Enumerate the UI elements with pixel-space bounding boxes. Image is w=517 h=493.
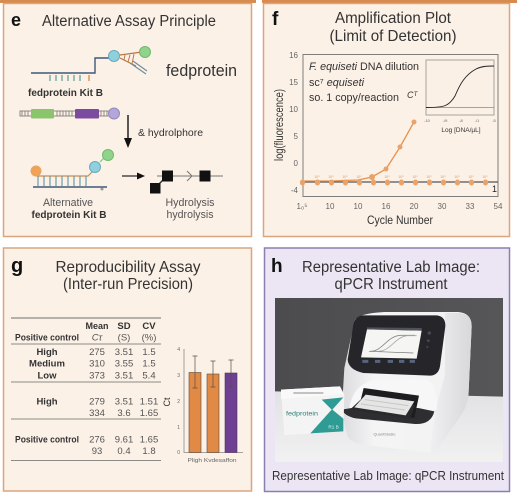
table: precision: 1.51 [140,396,158,408]
inset chart [407,60,497,134]
x axis labels: 10 [326,202,335,211]
y axis labels: -4 [291,186,299,195]
x axis labels: 20 [410,202,419,211]
bar chart: Ct: 2 [177,399,180,405]
point labels [314,175,488,179]
table: precision: (S) [118,332,130,344]
bar: medium [207,374,219,452]
table: precision: 3.51 [115,370,133,382]
legend text: sc⁷ equiseti [309,77,365,89]
x axis labels: 30 [438,202,447,211]
inset chart: -/1 [475,118,480,123]
reagent box [281,386,344,435]
inset chart: -8 [459,118,464,123]
bar chart: Ct: 3 [177,373,180,379]
x axis title: Cycle Number [367,213,433,227]
point labels: 10⁵ [440,175,446,179]
inset chart: Log [DNA/µL] [441,127,481,134]
label: alternative fedprotein kit B [32,197,106,221]
panel: amplification plot [264,4,510,236]
table: precision: 5.4 [142,370,156,382]
y axis title: log(fluorescence) [274,89,286,161]
legend text [309,61,419,104]
table: precision: 279 [89,396,105,408]
heading: reproducibility assay: (Inter-run Precision) [63,276,193,293]
point labels: 10⁵ [328,175,334,179]
label: fedprotein: fedprotein [166,62,237,80]
table: precision: 373 [89,370,105,382]
label: alternative fedprotein kit B: fedprotein Kit B [32,210,106,221]
x axis labels: 54 [494,202,503,211]
legend text: so. 1 copy/reaction [309,92,399,104]
x axis labels: 16 [382,202,391,211]
bar: high [189,372,201,452]
diagram: alternative probe [30,150,114,190]
y axis labels: 15 [289,78,299,87]
reagent box: R1 B [328,425,339,430]
touchscreen bezel [348,315,445,376]
bar chart: Ct [162,347,243,464]
table: precision [11,318,161,460]
panel: representative lab image [264,248,510,492]
bar chart: Ct: Pligh Kvdesaffon [188,458,236,464]
bar chart: Ct: 1 [177,425,180,431]
bar chart: Ct: 4 [177,347,180,353]
panel letter e: e [11,10,21,30]
table: precision: 3.55 [115,358,133,370]
point labels: 10⁵ [454,175,460,179]
label: fedprotein Kit B: fedprotein Kit B [28,88,103,99]
diagram: kit B probe [31,46,150,81]
table: precision: 3.51 [115,347,133,358]
reagent box: fedprotein [286,410,319,417]
label: hydrolysis: Hydrolysis [166,197,215,209]
point labels: 10⁵ [356,175,362,179]
table: precision: CV [142,321,156,332]
heading: amplification plot [330,10,456,45]
table: precision: 334 [89,408,105,419]
control icons [426,331,431,348]
heading: reproducibility assay [56,259,200,293]
point labels: 10⁵ [398,175,404,179]
table: precision: 0.4 [117,446,131,457]
table: precision: 3.6 [117,408,131,419]
point labels: 10⁵ [342,175,348,179]
table: precision: Positive control [15,434,79,446]
table: precision: 3.51 [115,396,133,408]
bar: low [225,373,237,452]
inset chart: -10 [424,118,431,123]
table: precision: 1.65 [140,408,158,419]
table: precision: High [36,396,58,408]
y axis labels: 0 [294,159,299,168]
photo: qPCR instrument [275,298,503,462]
table: precision: Positive control [15,332,79,344]
instrument body [342,312,472,452]
y axis labels: 10 [289,105,299,114]
point labels: 10⁵ [412,175,418,179]
table: precision: 93 [92,446,102,457]
drawer opening [358,388,419,418]
inset chart: -5 [492,118,497,123]
inset chart: -/9 [443,118,448,123]
table: precision: Cτ [92,332,104,344]
arrow: right [122,172,145,180]
legend text: F. equiseti DNA dilution [309,61,419,73]
table: precision: Medium [29,358,65,370]
table: precision: 310 [89,358,105,370]
table: precision: 1.5 [142,358,156,370]
x axis labels: 33 [466,202,475,211]
plate tray [350,398,415,419]
panel letter h: h [271,256,283,277]
diagram: double-stranded construct [20,108,120,119]
y axis labels: 16 [289,51,299,60]
panel letter g: g [11,255,23,277]
table: precision: 1.5 [142,347,156,358]
amplification curve [303,122,414,181]
label: hydrolysis [166,197,215,221]
heading: amplification plot: Amplification Plot [335,10,452,27]
x axis labels: 1₀⁵ [296,202,308,211]
table: precision: Low [38,370,57,382]
y axis labels [289,51,299,195]
table: precision: SD [117,321,131,332]
caption: Representative Lab Image: qPCR Instrument [272,469,504,483]
label: hydrolysis: hydrolysis [166,209,214,221]
heading: representative lab image: Representative Lab Image: [302,259,480,276]
heading: representative lab image: qPCR Instrument [334,276,448,293]
label: alternative fedprotein kit B: Alternative [43,197,93,209]
point labels: 10⁵ [384,175,390,179]
point labels: 10⁵ [468,175,474,179]
bar chart: Ct: Ct [162,397,172,406]
table: precision: 275 [89,347,105,358]
x axis labels [296,202,503,211]
point labels: 10⁵ [314,175,320,179]
panel letter f: f [272,9,279,30]
line chart: amplification: 1 [492,184,497,194]
y axis labels: 5 [294,132,299,141]
table: precision: (%) [142,332,156,344]
heading: reproducibility assay: Reproducibility Assay [56,259,200,276]
heading: amplification plot: (Limit of Detection) [330,28,456,45]
point labels: 10⁵ [426,175,432,179]
diagram: hydrolysis products [150,170,223,194]
error bars [192,356,234,388]
bar chart: Ct: 0 [177,450,180,456]
table: precision: Mean [86,321,109,332]
touchscreen [361,327,422,361]
arrow: down [124,115,132,148]
inset chart: Cᵀ [407,90,418,100]
point labels: 10⁵ [482,175,488,179]
panel: alternative assay principle [4,4,252,236]
line chart: amplification [274,51,503,227]
dark apron [342,406,434,424]
x axis labels: 10 [354,202,363,211]
table: precision: 9.61 [115,434,133,446]
table: precision: 1.8 [142,446,156,457]
table: precision: High [36,347,58,358]
brand mark: QuantStudio [373,431,396,436]
table: precision: 276 [89,434,105,446]
heading: alternative assay principle: Alternative Assay Principle [42,13,216,30]
panel: reproducibility assay [4,248,252,491]
label: hydrophore: & hydrolphore [138,127,203,139]
table: precision: 1.65 [140,434,158,446]
heading: representative lab image [302,259,480,293]
drawer recess [349,380,437,411]
data points [300,120,488,186]
